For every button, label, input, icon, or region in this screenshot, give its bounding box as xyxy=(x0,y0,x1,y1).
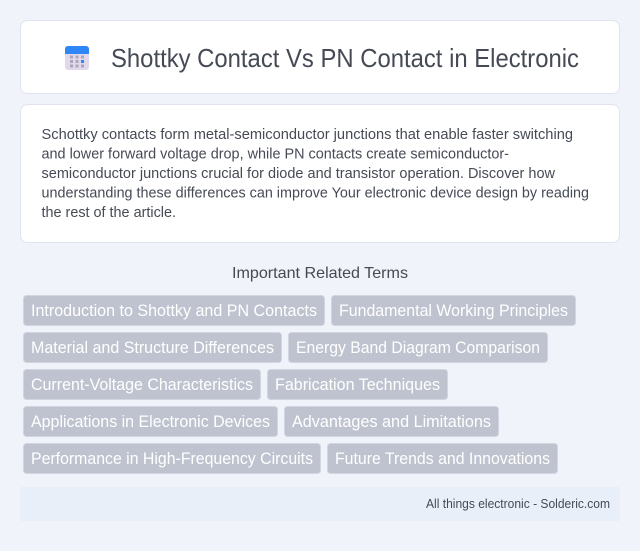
tag: advantages xyxy=(284,406,498,436)
tag: energy band: Energy Band Diagram Comparison xyxy=(296,339,540,357)
footer credit: All things electronic - Solderic.com xyxy=(426,497,610,511)
tag: high-frequency: Performance in High-Frequency Circuits xyxy=(31,450,313,468)
heading: related terms: Important Related Terms xyxy=(232,265,408,282)
tag: fabrication xyxy=(268,370,448,400)
tag: material and structure: Material and Structure Differences xyxy=(31,339,274,357)
tag: current-voltage: Current-Voltage Characteristics xyxy=(31,376,253,394)
tag: material and structure xyxy=(24,332,282,362)
tag: working principles: Fundamental Working Principles xyxy=(339,302,568,320)
tag: advantages: Advantages and Limitations xyxy=(292,413,491,431)
panel: summary xyxy=(20,104,620,242)
tag: working principles xyxy=(332,296,576,326)
title: Shottky Contact Vs PN Contact in Electronic xyxy=(111,43,579,73)
tag: fabrication: Fabrication Techniques xyxy=(275,376,440,394)
tag: future trends xyxy=(328,444,558,474)
tag: applications: Applications in Electronic Devices xyxy=(31,413,270,431)
tag: high-frequency xyxy=(24,444,320,474)
text block: summary paragraph xyxy=(42,126,589,221)
text block: summary paragraph: Schottky contacts form metal-semiconductor junctions that enable faster switching xyxy=(42,126,573,143)
tag: introduction: Introduction to Shottky and PN Contacts xyxy=(31,302,317,320)
panel: header xyxy=(20,20,620,94)
text block: summary paragraph: semiconductor junctions crucial for diode and transistor operation. Discover how xyxy=(42,165,555,182)
tag: applications xyxy=(24,406,278,436)
tag: energy band xyxy=(288,332,548,362)
tag: future trends: Future Trends and Innovations xyxy=(335,450,550,468)
panel: related term tags xyxy=(24,296,576,474)
text block: summary paragraph: and lower forward voltage drop, while PN contacts create semiconductor- xyxy=(42,146,509,162)
text block: summary paragraph: the rest of the article. xyxy=(42,204,176,221)
tag: current-voltage xyxy=(24,370,260,400)
icon: calendar xyxy=(65,46,89,70)
footer xyxy=(20,487,620,521)
text block: summary paragraph: understanding these differences can improve Your electronic device design by reading xyxy=(42,184,589,202)
tag: introduction xyxy=(24,296,324,326)
